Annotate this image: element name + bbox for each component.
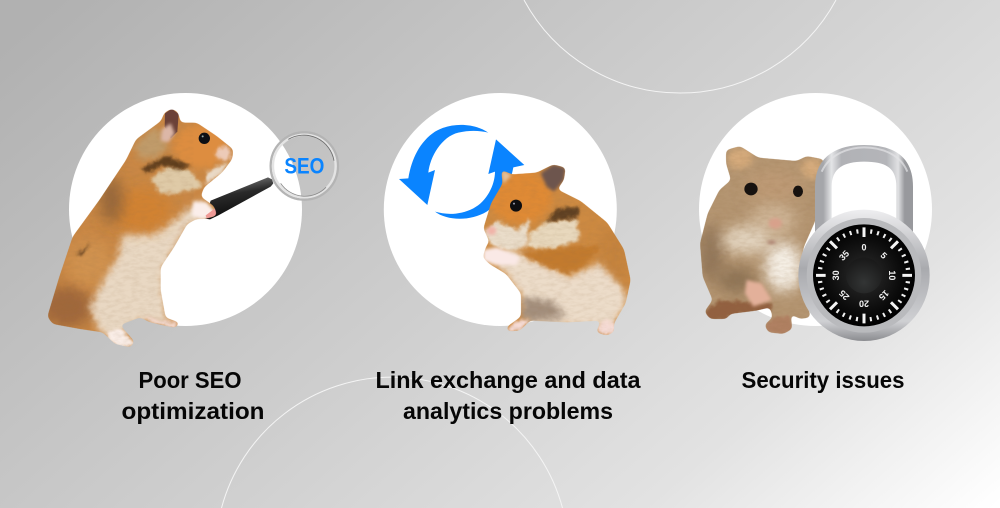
decorative arc: bottom bbox=[222, 377, 562, 508]
decorative arc: top bbox=[524, 0, 836, 93]
dial numbers bbox=[831, 242, 897, 308]
dial numbers: 30 bbox=[831, 270, 841, 280]
SEO label: SEO bbox=[284, 154, 324, 179]
dial numbers: 0 bbox=[861, 242, 866, 252]
dial numbers: 25 bbox=[837, 288, 851, 302]
dial numbers: 10 bbox=[887, 270, 897, 280]
white circle 2 bbox=[384, 93, 617, 326]
white circle 1 bbox=[69, 93, 302, 326]
heading: poor SEO optimization: Poor SEO bbox=[138, 367, 242, 393]
icon: magnifying glass with SEO bbox=[205, 132, 338, 219]
heading: link exchange and data analytics problems: Link exchange and data bbox=[376, 367, 641, 393]
dial numbers: 15 bbox=[877, 288, 891, 302]
heading: link exchange and data analytics problems bbox=[376, 367, 641, 424]
dial numbers: 35 bbox=[837, 248, 851, 263]
white circle 3 bbox=[699, 93, 932, 326]
heading: security issues: Security issues bbox=[742, 367, 904, 393]
hamster 3 bbox=[700, 146, 823, 334]
shackle bbox=[823, 153, 905, 233]
lock body bbox=[798, 210, 930, 341]
hamster 1 bbox=[48, 110, 233, 347]
dial knob bbox=[846, 257, 882, 293]
icon: combination padlock bbox=[798, 147, 930, 341]
panel: poor SEO optimization bbox=[48, 93, 339, 347]
heading: poor SEO optimization: optimization bbox=[122, 398, 264, 424]
icon: sync arrows bbox=[399, 125, 524, 219]
dial numbers: 5 bbox=[878, 250, 889, 261]
panel: security issues bbox=[690, 93, 932, 343]
heading: poor SEO optimization bbox=[122, 367, 264, 424]
heading: link exchange and data analytics problems: analytics problems bbox=[403, 398, 613, 424]
dial numbers: 20 bbox=[859, 298, 869, 308]
dial bbox=[813, 224, 915, 326]
hamster 2 bbox=[484, 164, 630, 335]
panel: link exchange and data analytics problems bbox=[384, 93, 630, 335]
